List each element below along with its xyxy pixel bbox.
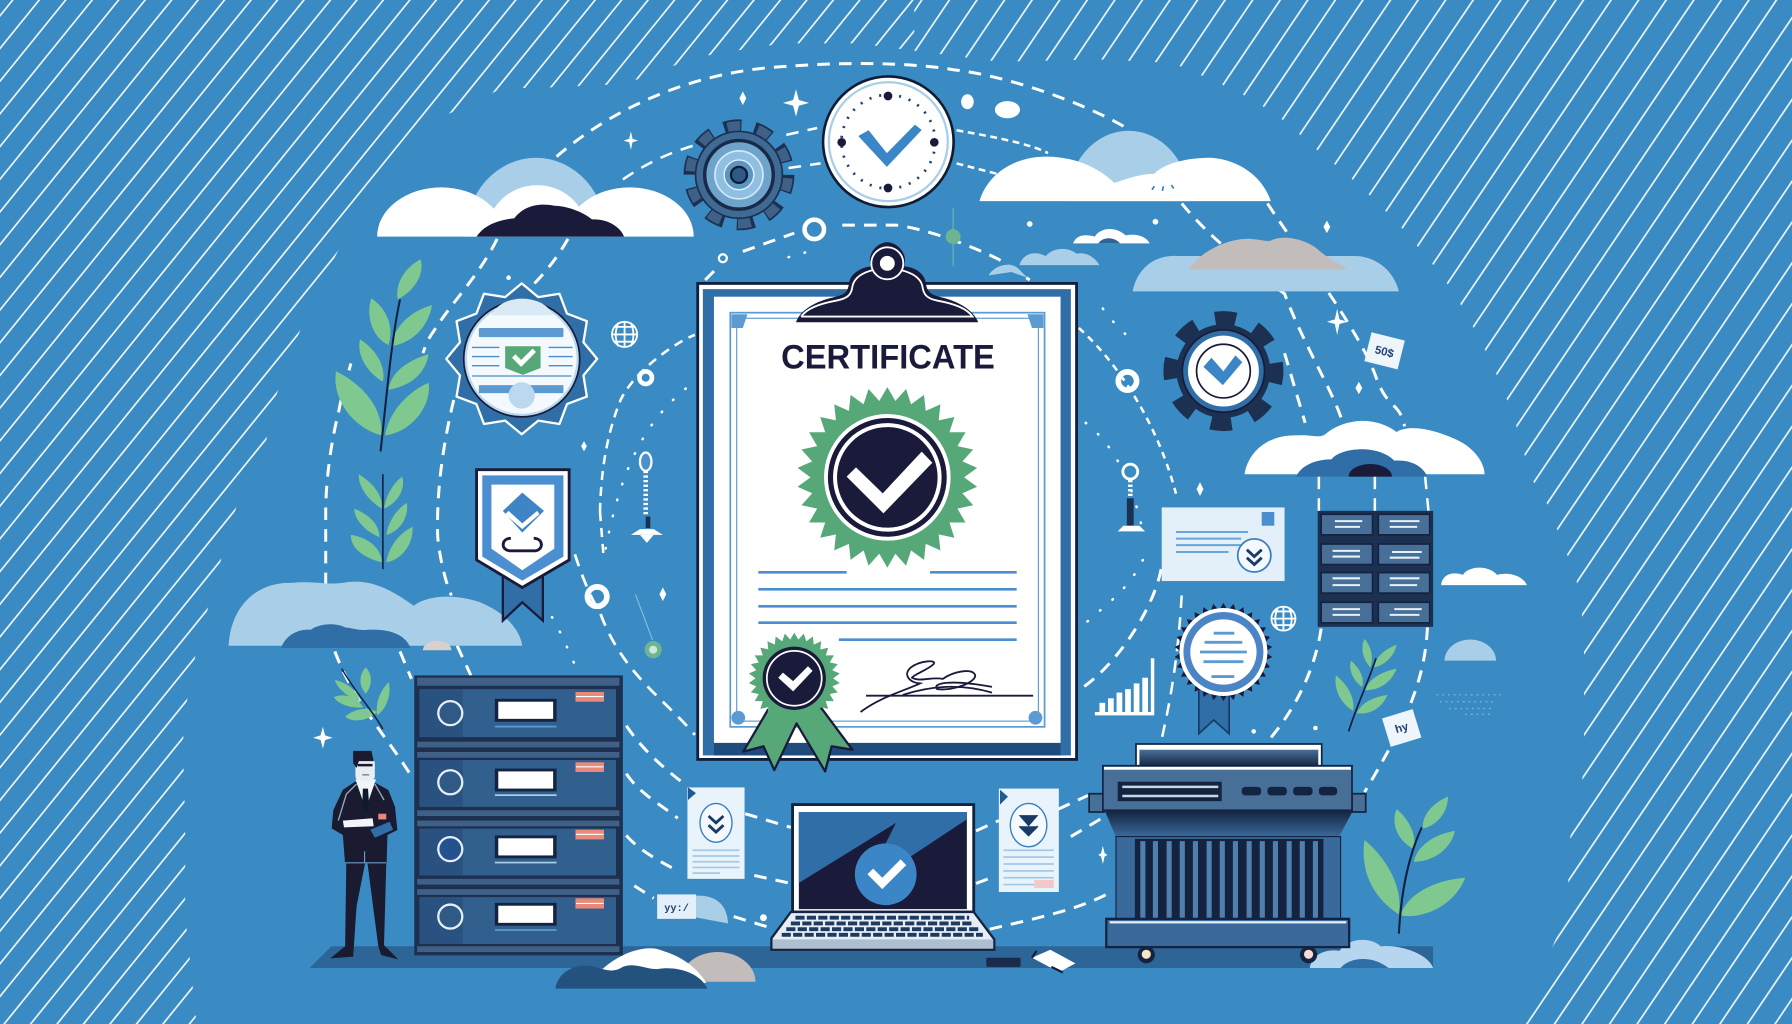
leaf branch: lower left	[334, 667, 390, 729]
server unit 2	[419, 760, 616, 807]
funnel	[1105, 810, 1353, 837]
cloud: small white right	[1441, 568, 1527, 585]
paper sheet	[714, 297, 1061, 743]
certificate title: CERTIFICATE	[781, 339, 995, 377]
clock check badge	[822, 75, 955, 208]
gear: check	[1163, 311, 1284, 431]
signature	[861, 661, 1033, 712]
ribbon seal	[743, 618, 855, 771]
base	[1106, 919, 1349, 947]
check circle	[855, 843, 917, 905]
cloud: small pale dome right	[1445, 640, 1496, 661]
bar chart icon	[1095, 658, 1154, 715]
body text lines	[758, 572, 1017, 640]
small dotted trails	[552, 249, 1143, 691]
note with 50$: 50$	[1374, 344, 1396, 361]
leaf branch: bottom right	[1364, 797, 1465, 934]
cloud: bottom right small	[1310, 940, 1433, 968]
server unit 1	[419, 689, 616, 737]
cloud: pale with taupe	[1133, 238, 1399, 291]
shield badge	[477, 470, 569, 621]
inner double border	[730, 313, 1045, 727]
floor debris	[986, 950, 1075, 973]
server unit 3	[419, 829, 616, 875]
leaf branch: middle left	[351, 474, 413, 569]
note with scribble	[1382, 709, 1421, 747]
buttons	[1242, 787, 1337, 795]
cloud: top right	[979, 131, 1271, 201]
cloud: top left	[377, 158, 694, 237]
cloud: small white	[1073, 229, 1150, 243]
control head	[1103, 766, 1352, 810]
shirt and tie	[355, 779, 376, 809]
small envelope note: yy:/	[664, 903, 689, 915]
ring nodes	[587, 220, 1137, 606]
clip	[796, 242, 978, 322]
head	[355, 759, 375, 781]
dashed connection arcs	[326, 64, 1429, 929]
cloud: right white with blue	[1245, 421, 1485, 477]
certificate board	[698, 242, 1077, 771]
envelope	[1162, 507, 1285, 581]
document left	[687, 787, 745, 879]
globes	[612, 322, 1295, 631]
small envelope note	[657, 894, 728, 923]
laptop	[771, 805, 994, 950]
green node markers	[635, 208, 961, 658]
grill slats	[1143, 841, 1315, 919]
keyboard base	[771, 912, 994, 950]
printer machine	[1089, 744, 1366, 963]
main seal	[798, 358, 1007, 580]
legs	[330, 863, 398, 959]
crossed arms	[343, 818, 374, 827]
board frame	[698, 283, 1077, 759]
cloud: bottom left pile	[555, 948, 755, 989]
round seal right	[1175, 587, 1288, 734]
cloud: small pale	[1019, 249, 1099, 265]
body	[1116, 837, 1341, 919]
note with 50$	[1364, 332, 1405, 369]
cloud: big pale left	[229, 582, 522, 650]
leaf branch: right middle	[1336, 639, 1397, 731]
leaf branch: upper left	[335, 259, 432, 451]
document right	[999, 789, 1059, 892]
sparkles	[313, 89, 1362, 921]
server rack right	[1318, 511, 1433, 627]
pointer pin right	[1118, 464, 1145, 531]
server unit 4	[419, 897, 616, 944]
side lugs	[1089, 794, 1104, 812]
corner ornaments	[731, 314, 1043, 725]
pointer pin left	[631, 453, 663, 543]
note with scribble: hy	[1394, 721, 1411, 736]
cloud: behind certificate	[989, 265, 1027, 278]
floor band	[310, 946, 1433, 968]
screen frame	[793, 805, 974, 912]
medallion left	[446, 283, 597, 434]
server rails	[417, 678, 619, 952]
wheels	[1138, 946, 1155, 963]
faint text dots	[1437, 695, 1503, 714]
businessman	[330, 751, 398, 959]
top feeder	[1136, 744, 1322, 767]
gear: top left	[688, 124, 790, 226]
jacket	[332, 782, 397, 863]
server stack left	[414, 675, 623, 955]
